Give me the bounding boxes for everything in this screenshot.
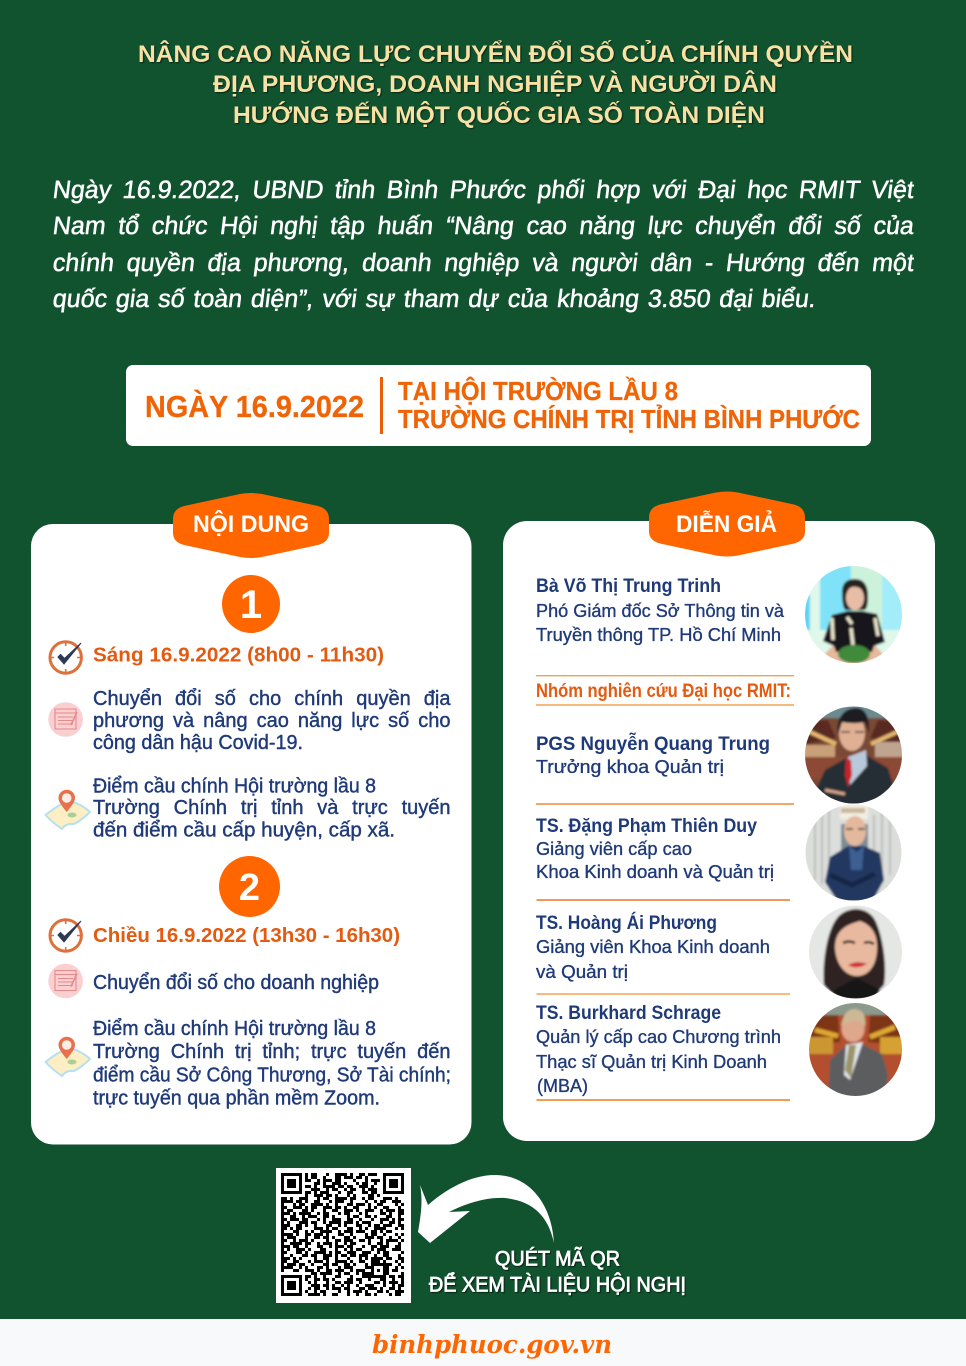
venue: TẠI HỘI TRƯỜNG LẦU 8	[398, 376, 678, 406]
morning location text: đến điểm cầu cấp huyện, cấp xã.	[93, 820, 395, 842]
number 1: 1	[240, 583, 262, 627]
intro paragraph: chính quyền địa phương, doanh nghiệp và người dân - Hướng đến một	[53, 249, 914, 277]
speaker: Đặng Phạm Thiên Duy: Giảng viên cấp cao	[536, 838, 692, 859]
photo: Nguyễn Quang Trung	[803, 704, 904, 806]
footer: binhphuoc.gov.vn	[372, 1330, 612, 1359]
venue: TRƯỜNG CHÍNH TRỊ TỈNH BÌNH PHƯỚC	[398, 404, 860, 434]
morning location text: Trường Chính trị tỉnh và trực tuyến	[93, 797, 450, 819]
title: NÂNG CAO NĂNG LỰC CHUYỂN ĐỔI SỐ CỦA CHÍNH QUYỀN	[138, 39, 853, 68]
morning topic text	[93, 684, 450, 754]
speaker: Hoàng Ái Phương: TS. Hoàng Ái Phương	[536, 912, 717, 934]
intro paragraph	[53, 172, 914, 317]
icon: map pin afternoon	[46, 1037, 90, 1076]
afternoon location text	[93, 1018, 451, 1110]
number 1	[222, 575, 280, 633]
panel: program content	[31, 493, 472, 1144]
afternoon time heading: Chiều 16.9.2022 (13h30 - 16h30)	[93, 925, 400, 947]
speaker: Đặng Phạm Thiên Duy: Khoa Kinh doanh và Quản trị	[536, 861, 774, 882]
badge: speakers heading: DIỄN GIẢ	[676, 509, 777, 538]
QR caption	[429, 1246, 686, 1296]
speaker: Nguyễn Quang Trung	[536, 733, 770, 777]
speaker: Hoàng Ái Phương: Giảng viên Khoa Kinh doanh	[536, 936, 770, 957]
number 2	[219, 856, 280, 917]
title: ĐỊA PHƯƠNG, DOANH NGHIỆP VÀ NGƯỜI DÂN	[213, 70, 777, 98]
speaker: Nguyễn Quang Trung: Trưởng khoa Quản trị	[536, 756, 724, 777]
research group heading: Nhóm nghiên cứu Đại học RMIT:	[536, 681, 791, 702]
rule	[536, 993, 790, 995]
morning topic text: phương và nâng cao năng lực số cho	[93, 710, 450, 732]
intro paragraph: Ngày 16.9.2022, UBND tỉnh Bình Phước phối hợp với Đại học RMIT Việt	[53, 176, 914, 204]
badge: program content heading	[173, 493, 329, 558]
speaker: Hoàng Ái Phương	[536, 912, 770, 982]
speaker: Burkhard Schrage: Thạc sĩ Quản trị Kinh Doanh	[536, 1051, 767, 1072]
speaker: Burkhard Schrage	[536, 1003, 781, 1096]
QR caption: ĐỂ XEM TÀI LIỆU HỘI NGHỊ	[429, 1274, 686, 1296]
photo: Hoàng Ái Phương	[807, 903, 905, 1001]
afternoon location text: điểm cầu Sở Công Thương, Sở Tài chính;	[93, 1064, 451, 1086]
photo: Đặng Phạm Thiên Duy	[803, 803, 904, 903]
icon: clock check afternoon	[50, 920, 81, 951]
rule	[536, 899, 790, 901]
title	[138, 39, 853, 129]
icon: clock check morning	[50, 642, 81, 673]
afternoon topic text: Chuyển đổi số cho doanh nghiệp	[93, 972, 379, 994]
morning topic text: công dân hậu Covid-19.	[93, 732, 303, 754]
speaker: Hoàng Ái Phương: và Quản trị	[536, 961, 628, 982]
speaker: Võ Thị Trung Trinh: Bà Võ Thị Trung Trinh	[536, 576, 721, 597]
afternoon location text: trực tuyến qua phần mềm Zoom.	[93, 1088, 380, 1110]
morning location text: Điểm cầu chính Hội trường lầu 8	[93, 776, 376, 798]
speaker: Võ Thị Trung Trinh: Truyền thông TP. Hồ Chí Minh	[536, 624, 781, 645]
number 2: 2	[239, 867, 260, 909]
speaker: Burkhard Schrage: (MBA)	[537, 1075, 588, 1096]
intro paragraph: quốc gia số toàn diện”, với sự tham dự của khoảng 3.850 đại biểu.	[53, 285, 816, 313]
date: NGÀY 16.9.2022	[145, 389, 364, 424]
rule	[536, 1099, 790, 1101]
afternoon location text: Điểm cầu chính Hội trường lầu 8	[93, 1018, 376, 1040]
morning location text	[93, 776, 450, 842]
rule	[536, 676, 794, 705]
badge: speakers heading	[649, 492, 805, 556]
speaker: Burkhard Schrage: TS. Burkhard Schrage	[536, 1003, 721, 1024]
venue	[398, 376, 860, 434]
morning topic text: Chuyển đổi số cho chính quyền địa	[93, 688, 450, 710]
QR code	[276, 1168, 411, 1303]
speaker: Nguyễn Quang Trung: PGS Nguyễn Quang Trung	[536, 733, 770, 755]
icon: document afternoon	[48, 964, 83, 998]
panel: speakers	[503, 492, 935, 1141]
icon: map pin morning	[46, 790, 90, 829]
rule	[536, 803, 794, 805]
speaker: Võ Thị Trung Trinh	[536, 576, 785, 645]
title: HƯỚNG ĐẾN MỘT QUỐC GIA SỐ TOÀN DIỆN	[233, 101, 765, 129]
speaker: Đặng Phạm Thiên Duy: TS. Đặng Phạm Thiên Duy	[536, 816, 757, 837]
QR caption: QUÉT MÃ QR	[495, 1246, 620, 1270]
speaker: Đặng Phạm Thiên Duy	[536, 816, 774, 882]
speaker: Võ Thị Trung Trinh: Phó Giám đốc Sở Thông tin và	[536, 600, 785, 621]
photo: Burkhard Schrage	[807, 1001, 905, 1099]
date and venue box	[126, 365, 871, 446]
icon: document morning	[48, 702, 83, 737]
morning time heading: Sáng 16.9.2022 (8h00 - 11h30)	[93, 644, 384, 666]
arrow pointing to QR code	[418, 1175, 554, 1243]
footer	[0, 1319, 966, 1366]
afternoon location text: Trường Chính trị tỉnh; trực tuyến đến	[93, 1040, 450, 1062]
badge: program content heading: NỘI DUNG	[193, 510, 309, 538]
photo: Võ Thị Trung Trinh	[803, 564, 904, 665]
speaker: Burkhard Schrage: Quản lý cấp cao Chương trình	[536, 1026, 781, 1047]
intro paragraph: Nam tổ chức Hội nghị tập huấn “Nâng cao năng lực chuyển đổi số của	[53, 212, 914, 240]
